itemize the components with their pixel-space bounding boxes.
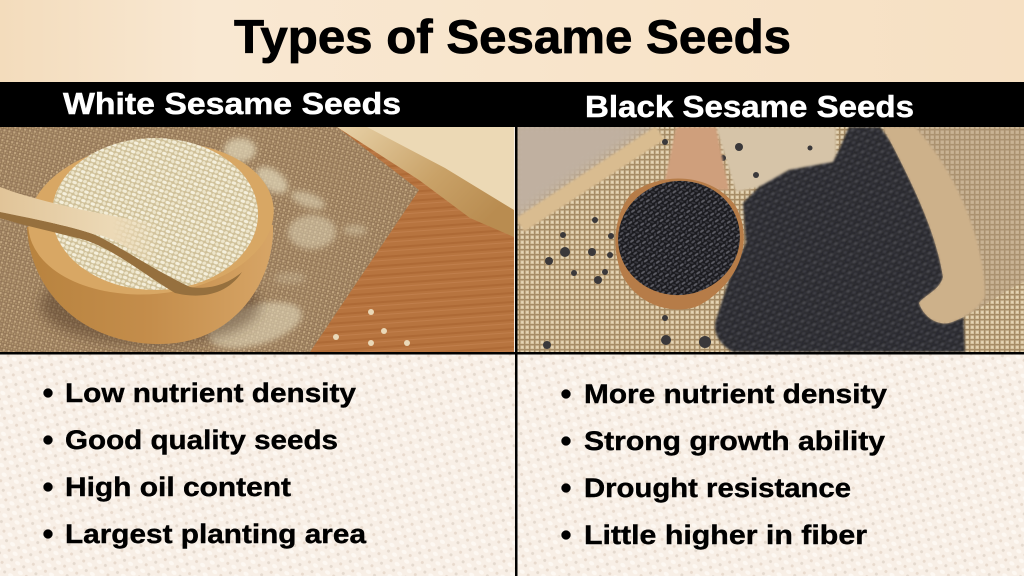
bullet: good quality seeds: Good quality seeds — [65, 425, 338, 455]
bullet: little higher in fiber: Little higher in fiber — [584, 520, 868, 550]
blurred background — [518, 127, 660, 225]
heading: black sesame seeds: Black Sesame Seeds — [585, 89, 914, 124]
spoon handle — [663, 127, 729, 190]
dividers — [0, 127, 1024, 576]
wooden board — [337, 127, 514, 237]
photo: black sesame seeds with spoon and sack — [510, 120, 1024, 352]
seed pile — [715, 127, 965, 352]
spoon — [0, 187, 242, 296]
sack lip — [883, 127, 985, 323]
bullet: low nutrient density: Low nutrient density — [65, 378, 356, 408]
title band — [0, 0, 1024, 82]
panel: white sesame facts — [44, 378, 367, 549]
bullet: more nutrient density: More nutrient density — [584, 379, 887, 409]
scattered seeds on burlap — [203, 138, 367, 357]
bullet: strong growth ability: Strong growth ability — [584, 426, 885, 456]
text panels background — [0, 354, 1024, 576]
burlap sack — [883, 127, 1024, 323]
header bar — [0, 82, 1024, 127]
bullet: drought resistance: Drought resistance — [584, 473, 851, 503]
title: Types of Sesame Seeds — [234, 10, 791, 63]
loose seeds on wood — [333, 309, 410, 346]
heading: white sesame seeds: White Sesame Seeds — [63, 86, 401, 121]
bullet: largest planting area: Largest planting area — [65, 519, 367, 549]
bullet: high oil content: High oil content — [65, 472, 291, 502]
panel: black sesame facts — [562, 379, 887, 550]
scattered black seeds — [543, 139, 812, 349]
spoon — [615, 178, 744, 310]
bowl — [22, 132, 280, 345]
burlap mat — [0, 127, 419, 352]
photo: white sesame seeds in a wooden bowl — [0, 127, 514, 357]
